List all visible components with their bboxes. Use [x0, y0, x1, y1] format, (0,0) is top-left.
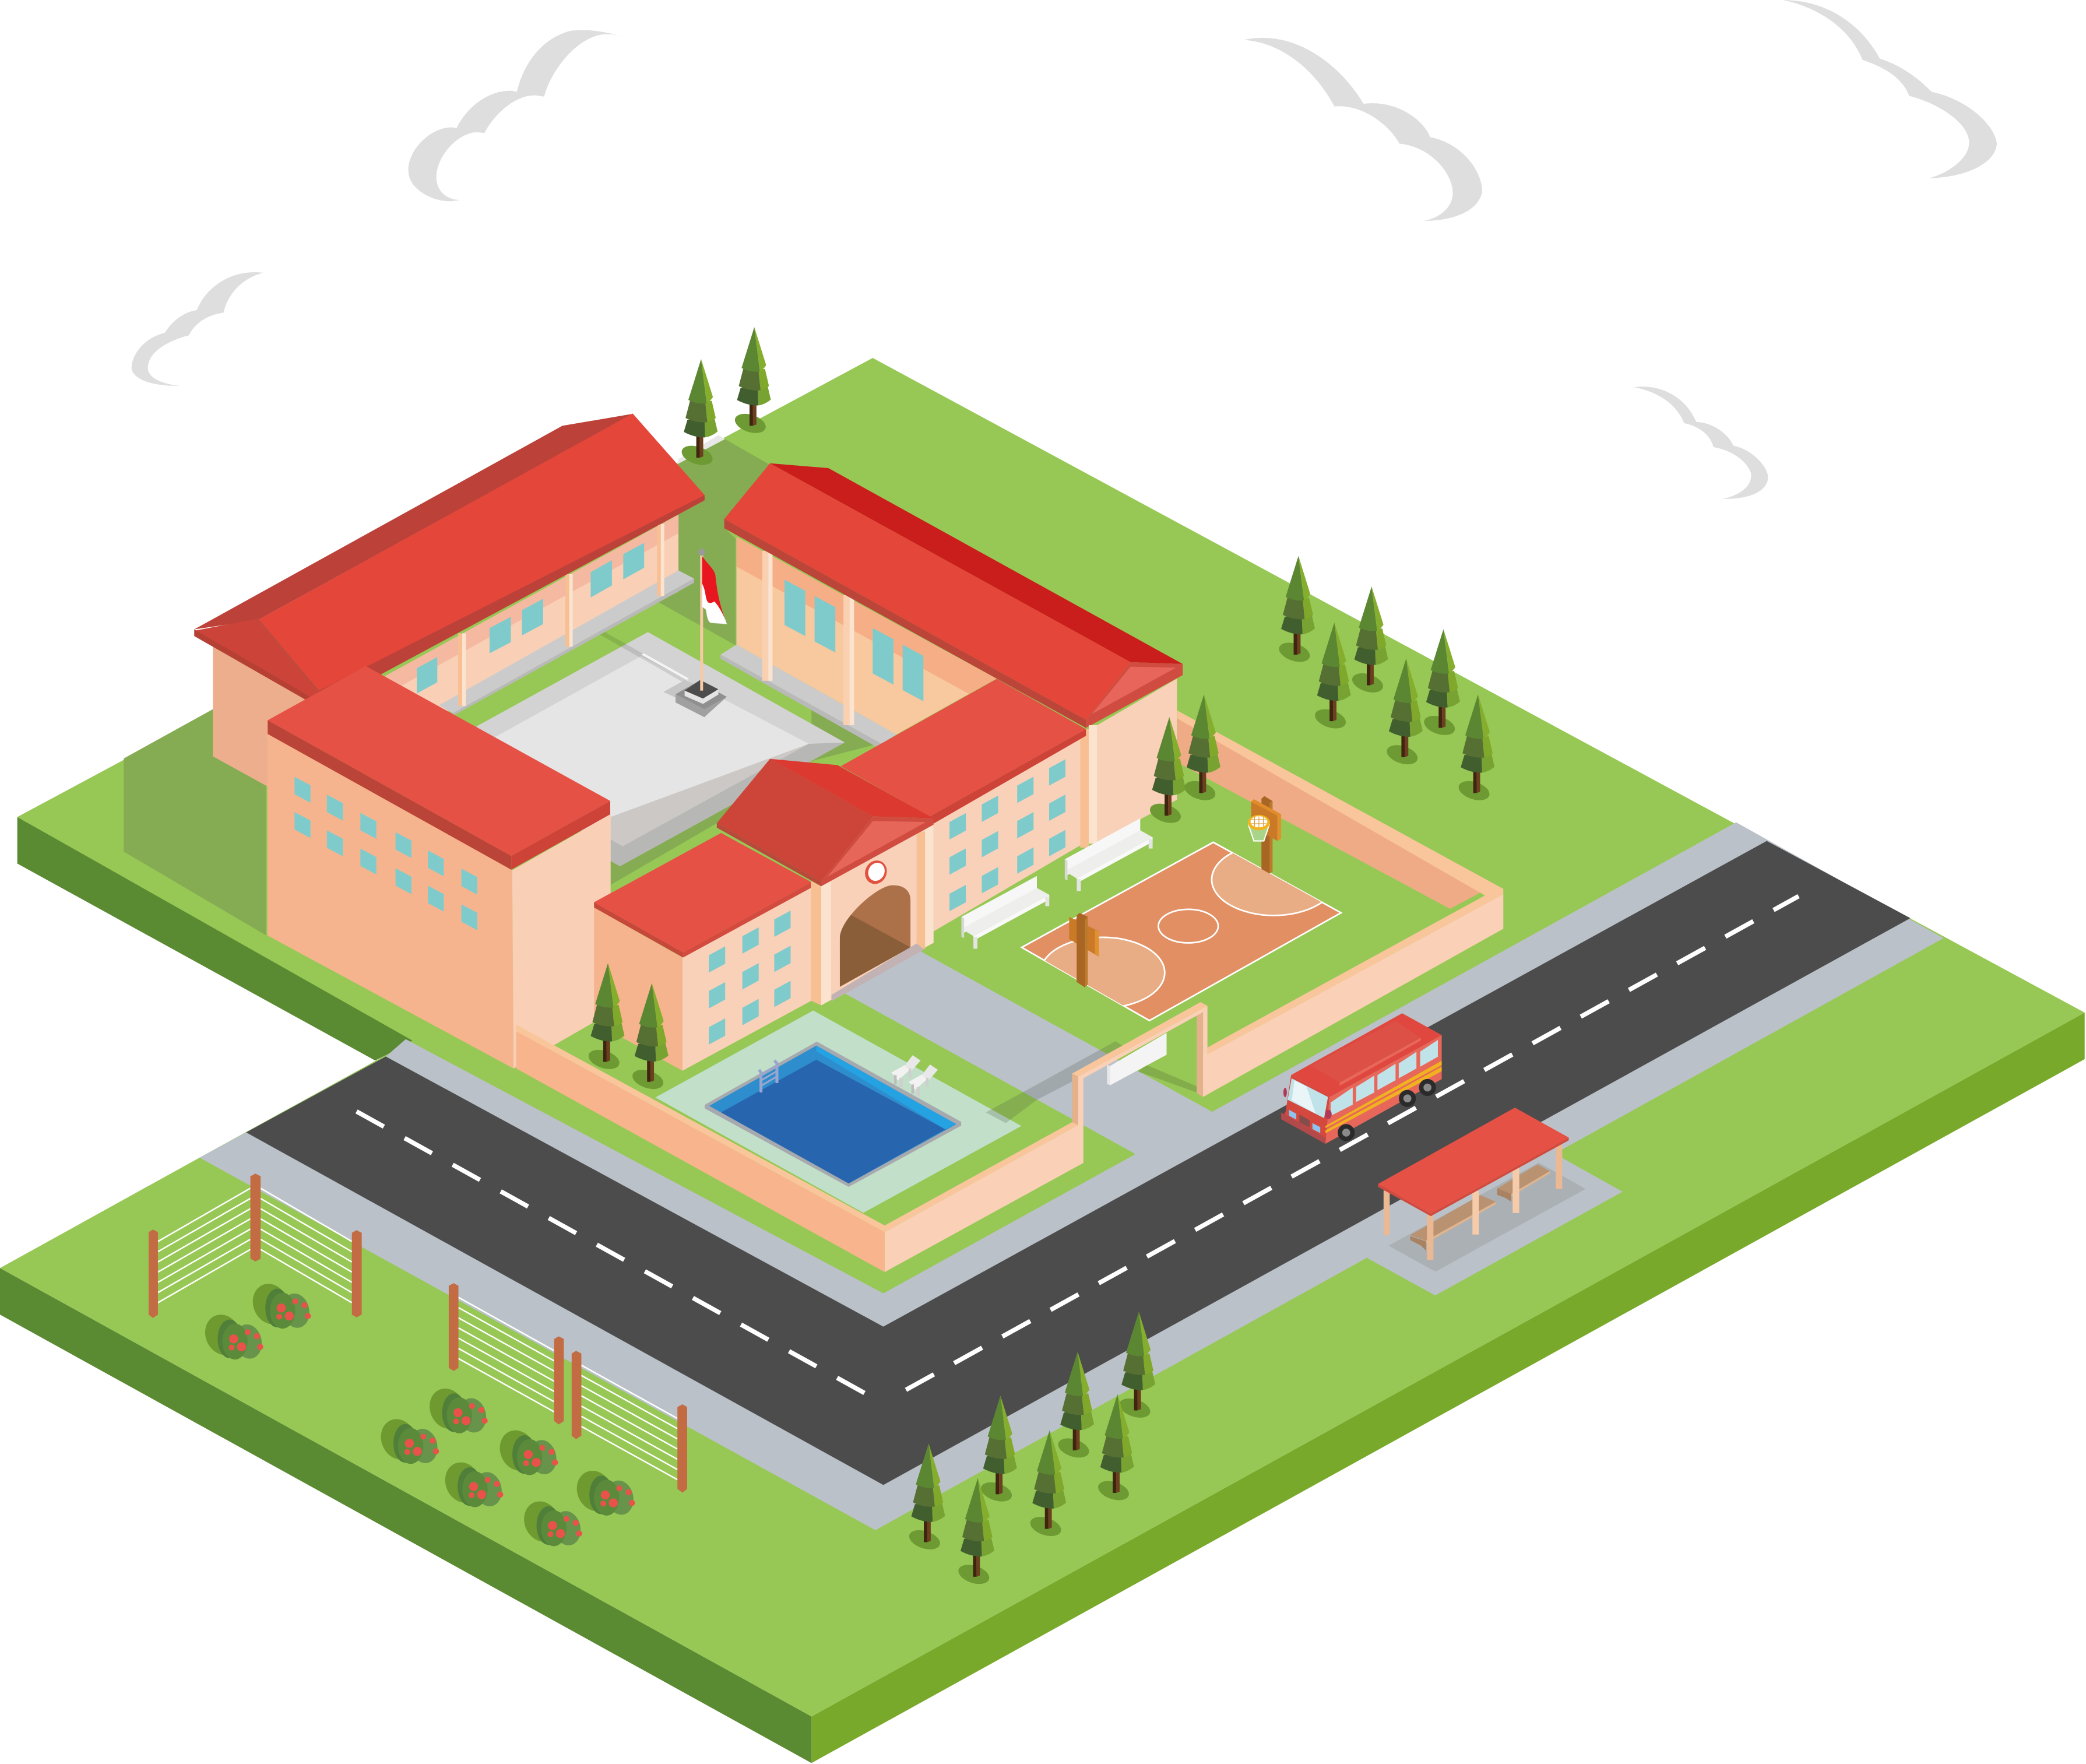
right wall	[512, 814, 611, 1069]
roof	[194, 414, 633, 630]
side wall	[213, 645, 319, 799]
front wall	[934, 735, 1086, 932]
gate sign	[1107, 1065, 1110, 1085]
centre circle	[1158, 909, 1218, 943]
roof	[1291, 1013, 1442, 1097]
right wall top	[1208, 889, 1503, 1054]
cloud: top right	[1783, 0, 1997, 178]
back posts	[1384, 1190, 1390, 1235]
flagpole	[663, 549, 727, 717]
courtyard wall	[737, 537, 997, 735]
building: entrance gate block	[717, 759, 934, 1005]
walkway	[720, 645, 896, 744]
rear wall inner face	[1177, 719, 1487, 909]
bus	[1281, 1013, 1442, 1144]
pillars	[458, 634, 462, 706]
ground island	[0, 358, 2085, 1763]
gate right post	[1197, 1012, 1203, 1097]
roof	[770, 463, 1183, 664]
windshield	[1288, 1078, 1328, 1118]
left wall	[594, 908, 683, 1071]
front	[1281, 1075, 1329, 1144]
sun loungers	[891, 1055, 921, 1087]
wheels	[1338, 1124, 1355, 1141]
pole	[700, 554, 703, 691]
cloud: small left	[132, 272, 263, 386]
swimming pool	[655, 1010, 1022, 1213]
pool walls	[709, 1046, 956, 1183]
perimeter wall: rear and right	[1177, 711, 1503, 1097]
left wall face	[516, 1031, 885, 1272]
right key	[1211, 853, 1322, 916]
tree grove: bottom	[907, 1312, 1155, 1587]
roof	[594, 833, 811, 953]
gate wall	[821, 824, 934, 1005]
roof	[1378, 1137, 1569, 1216]
fence: left pair	[149, 1173, 362, 1318]
windows	[949, 813, 966, 839]
right wall face	[885, 1125, 1084, 1272]
hip roof	[770, 759, 934, 818]
headlights and grille	[1289, 1110, 1296, 1120]
building: back left wing	[194, 413, 705, 799]
assembly courtyard	[476, 620, 845, 866]
building: front left block	[268, 666, 611, 1069]
courtyard wall	[385, 515, 678, 745]
roof	[268, 666, 610, 856]
bus stop shelter	[1378, 1108, 1586, 1271]
windows	[590, 560, 612, 598]
windows	[785, 579, 805, 636]
building: back right wing	[720, 463, 1183, 748]
back trees	[679, 327, 771, 469]
building shadows on grass	[124, 439, 878, 936]
cloud: small right	[1634, 386, 1768, 499]
left wall	[268, 733, 513, 1069]
ladder	[759, 1060, 777, 1092]
school badge	[861, 857, 891, 888]
driveway	[843, 951, 1218, 1160]
roof	[840, 679, 1086, 817]
windows	[294, 777, 311, 803]
mirrors	[1283, 1088, 1287, 1097]
shelter floor	[1389, 1162, 1586, 1271]
gate shadow on driveway	[986, 1041, 1131, 1123]
left hoop	[1040, 913, 1099, 998]
road with sidewalks	[199, 823, 1944, 1530]
end wall	[1097, 679, 1177, 842]
pool deck	[655, 1010, 1022, 1213]
pillars	[762, 551, 768, 681]
benches	[1410, 1195, 1496, 1241]
gate beam	[1078, 1006, 1208, 1078]
fence: right pair	[449, 1283, 687, 1493]
benches	[962, 818, 1153, 948]
right wall face	[1203, 894, 1503, 1097]
centre dashes: left road	[357, 1112, 865, 1393]
pool rim	[705, 1042, 961, 1187]
clouds	[132, 0, 1997, 499]
stripes	[1325, 1061, 1442, 1128]
asphalt	[246, 841, 1911, 1485]
cloud: top left	[409, 30, 624, 201]
plinth	[663, 680, 726, 711]
building: lower wing left of gate	[594, 833, 811, 1071]
flowering bushes	[199, 1278, 636, 1548]
tree grove: right	[1276, 556, 1494, 804]
right pillar	[917, 832, 925, 948]
sidewalk	[199, 823, 1944, 1530]
pillar	[1080, 729, 1089, 848]
left key	[1040, 937, 1165, 1008]
body side	[1325, 1035, 1442, 1144]
rear wall top	[1177, 711, 1503, 897]
walkway	[439, 571, 694, 713]
left pillar	[811, 881, 821, 1005]
bus stop pad	[1367, 1154, 1623, 1295]
windows	[709, 946, 725, 973]
right hoop	[1248, 796, 1281, 874]
centre dashes: right road	[906, 896, 1799, 1390]
cloud: top centre	[1244, 38, 1482, 221]
gate left post	[1072, 1074, 1078, 1125]
sign shadow on grass	[1138, 1065, 1197, 1092]
basketball court	[1022, 796, 1341, 1021]
water	[721, 1060, 945, 1183]
side windows	[1331, 1088, 1353, 1116]
right wall	[683, 887, 811, 1071]
trees beside building	[1148, 694, 1220, 827]
flag	[702, 581, 727, 624]
arch	[840, 885, 910, 987]
front trees	[586, 963, 669, 1092]
building: main block right wing	[840, 679, 1177, 932]
perimeter wall: front with gate	[516, 1002, 1208, 1272]
front post	[1427, 1215, 1433, 1260]
threshold	[832, 943, 924, 1002]
wall top	[516, 1025, 1078, 1232]
